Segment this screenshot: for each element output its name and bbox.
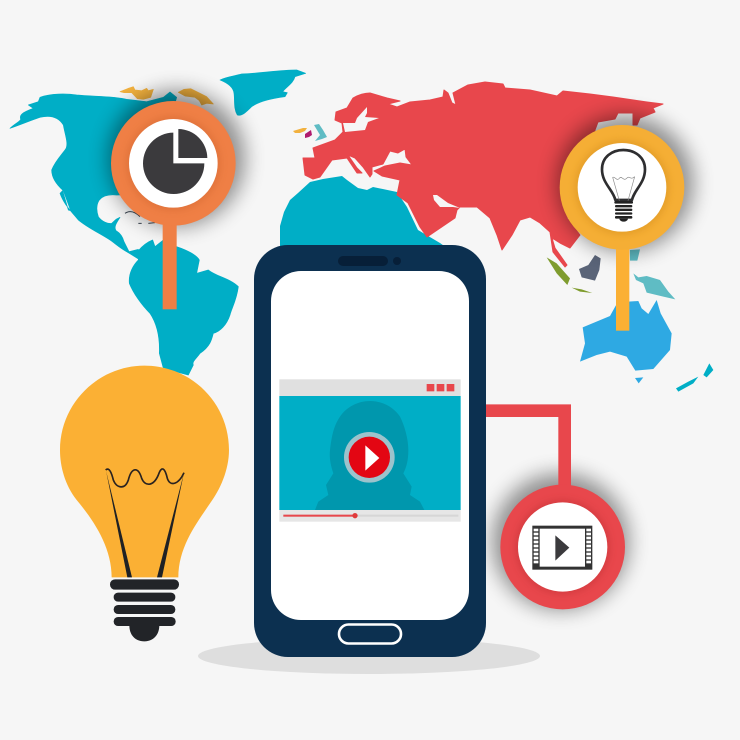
icon: film strip xyxy=(532,526,592,570)
ireland xyxy=(305,130,312,138)
world map xyxy=(10,70,713,392)
australia xyxy=(580,300,672,371)
pin stick xyxy=(163,220,177,309)
progress bar xyxy=(283,513,458,518)
control bar xyxy=(279,510,461,522)
smartphone xyxy=(254,245,486,657)
north america xyxy=(10,92,187,260)
window buttons xyxy=(427,384,454,391)
persian gulf xyxy=(433,195,460,208)
new guinea xyxy=(633,273,675,299)
map: africa xyxy=(280,176,450,250)
icon: outline bulb xyxy=(602,150,645,222)
pin face xyxy=(129,119,218,208)
pin face xyxy=(578,143,666,232)
pin shadow xyxy=(108,90,245,227)
red pin: film xyxy=(483,411,629,610)
pin ring xyxy=(111,101,236,226)
video frame xyxy=(279,396,461,510)
bulb base xyxy=(110,579,179,641)
baltic sea xyxy=(343,107,379,132)
eurasia xyxy=(303,82,663,267)
play button xyxy=(344,432,395,483)
new zealand xyxy=(676,363,713,392)
title bar xyxy=(279,379,461,396)
filament xyxy=(106,469,184,577)
big light bulb xyxy=(60,366,229,641)
bulb glass xyxy=(60,366,229,577)
phone screen xyxy=(271,271,469,620)
greenland xyxy=(220,70,306,115)
presenter silhouette xyxy=(315,401,424,510)
borneo xyxy=(579,255,601,281)
camera xyxy=(393,257,401,265)
map: americas xyxy=(10,70,306,375)
red connector line xyxy=(483,411,565,497)
java xyxy=(572,288,592,293)
philippines xyxy=(630,249,640,261)
south america xyxy=(129,240,238,375)
ground shadow xyxy=(198,638,540,674)
arctic islands xyxy=(120,87,213,105)
video player xyxy=(279,379,461,522)
home button xyxy=(339,624,401,644)
pin face xyxy=(518,502,607,592)
icon: pie chart xyxy=(143,129,207,194)
phone body xyxy=(254,245,486,657)
pin ring xyxy=(500,485,625,609)
tasmania xyxy=(635,377,643,383)
yellow pin: light bulb xyxy=(557,115,694,331)
speaker xyxy=(338,256,388,266)
orange pin: pie chart xyxy=(108,90,245,309)
pin shadow xyxy=(492,473,629,610)
pin shadow xyxy=(557,115,694,252)
iceland xyxy=(293,128,307,133)
caribbean islands xyxy=(125,212,155,223)
pin ring xyxy=(560,125,684,250)
great britain xyxy=(314,124,327,141)
sumatra xyxy=(547,257,570,285)
map: eurasia and islands xyxy=(293,82,713,392)
pin stick xyxy=(616,243,629,331)
